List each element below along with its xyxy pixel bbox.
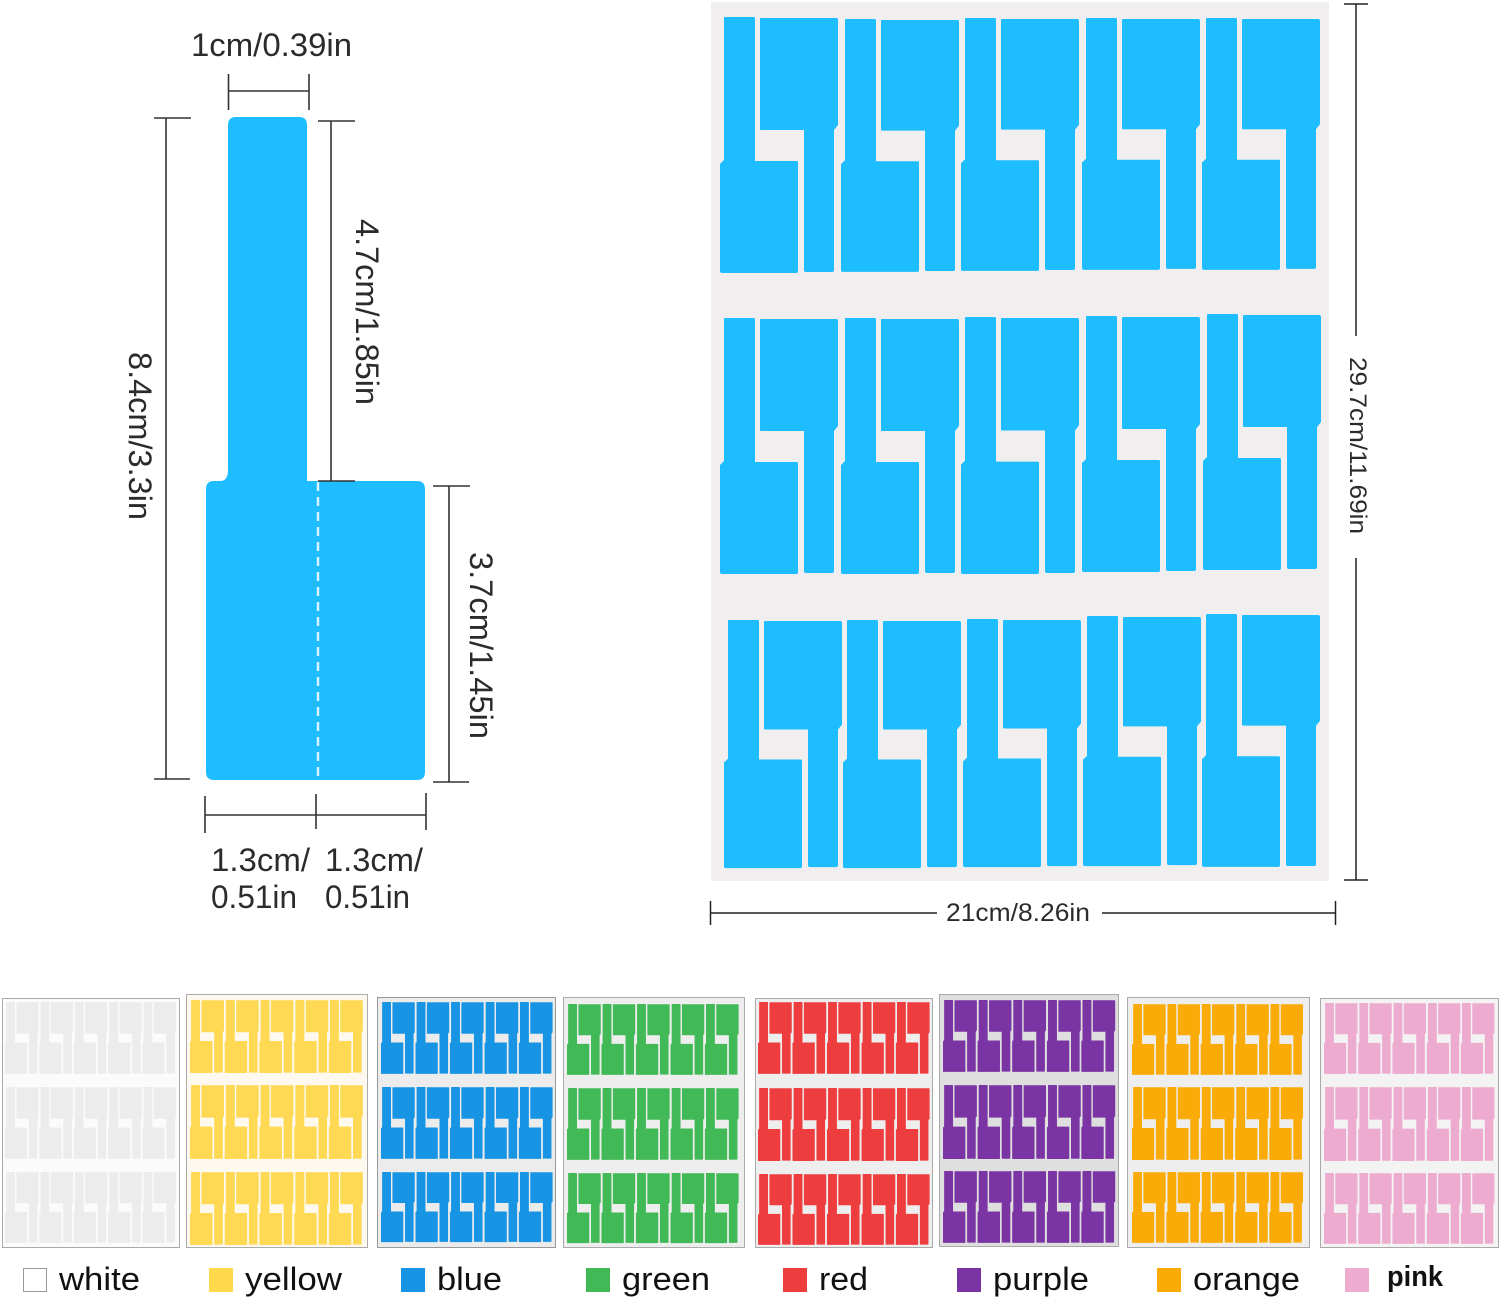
dimension: block widths: 1.3cm/ (325, 842, 423, 878)
dimension: strip height: 4.7cm/1.85in (349, 219, 385, 405)
sheet: purple (940, 994, 1118, 1246)
legend: purple (957, 1261, 1089, 1297)
legend: blue (401, 1261, 502, 1297)
dimension: block widths (205, 793, 426, 915)
panel: colour sheets (2, 994, 1498, 1248)
legend: yellow (209, 1261, 343, 1297)
panel: single label diagram (122, 27, 499, 915)
dimension: total height: 8.4cm/3.3in (122, 352, 158, 520)
legend: white: white (58, 1261, 140, 1297)
sheet: red (756, 998, 932, 1248)
sheet: pink (1320, 998, 1498, 1248)
legend: pink: pink (1387, 1261, 1444, 1293)
sheet: blue (378, 998, 556, 1248)
legend: orange: orange (1193, 1261, 1300, 1297)
legend: green: green (622, 1261, 710, 1297)
legend: red: red (819, 1261, 868, 1297)
legend: purple: purple (993, 1261, 1089, 1297)
sheet: white (2, 998, 180, 1248)
dimension: top width: 1cm/0.39in (191, 27, 352, 63)
legend (24, 1261, 1444, 1297)
panel: full label sheet (710, 2, 1371, 927)
sheet: yellow (186, 994, 368, 1248)
legend: yellow: yellow (245, 1261, 343, 1297)
legend: blue: blue (437, 1261, 502, 1297)
dimension: strip height (318, 121, 385, 481)
labels row 2 (720, 314, 1321, 574)
sheet: orange (1128, 998, 1310, 1248)
dimension: block widths: 0.51in (325, 879, 410, 915)
legend: white (24, 1261, 140, 1297)
dimension: block height (433, 486, 499, 782)
dimension: sheet height: 29.7cm/11.69in (1344, 357, 1371, 534)
dimension: sheet width (710, 899, 1336, 927)
fold line (317, 482, 319, 780)
label shape (206, 117, 425, 780)
legend: green (586, 1261, 710, 1297)
legend: red (783, 1261, 868, 1297)
labels row 3 (724, 614, 1320, 868)
dimension: top width (191, 27, 352, 110)
legend: orange (1157, 1261, 1300, 1297)
dimension: sheet width: 21cm/8.26in (946, 899, 1090, 927)
dimension: block widths: 1.3cm/ (211, 842, 310, 878)
dimension: block height: 3.7cm/1.45in (463, 552, 499, 739)
sheet: green (564, 998, 744, 1248)
dimension: block widths: 0.51in (211, 879, 297, 915)
labels row 1 (720, 17, 1320, 273)
sheet background (711, 2, 1329, 881)
dimension: total height (122, 118, 191, 779)
legend: pink (1345, 1261, 1444, 1293)
dimension: sheet height (1344, 4, 1371, 880)
